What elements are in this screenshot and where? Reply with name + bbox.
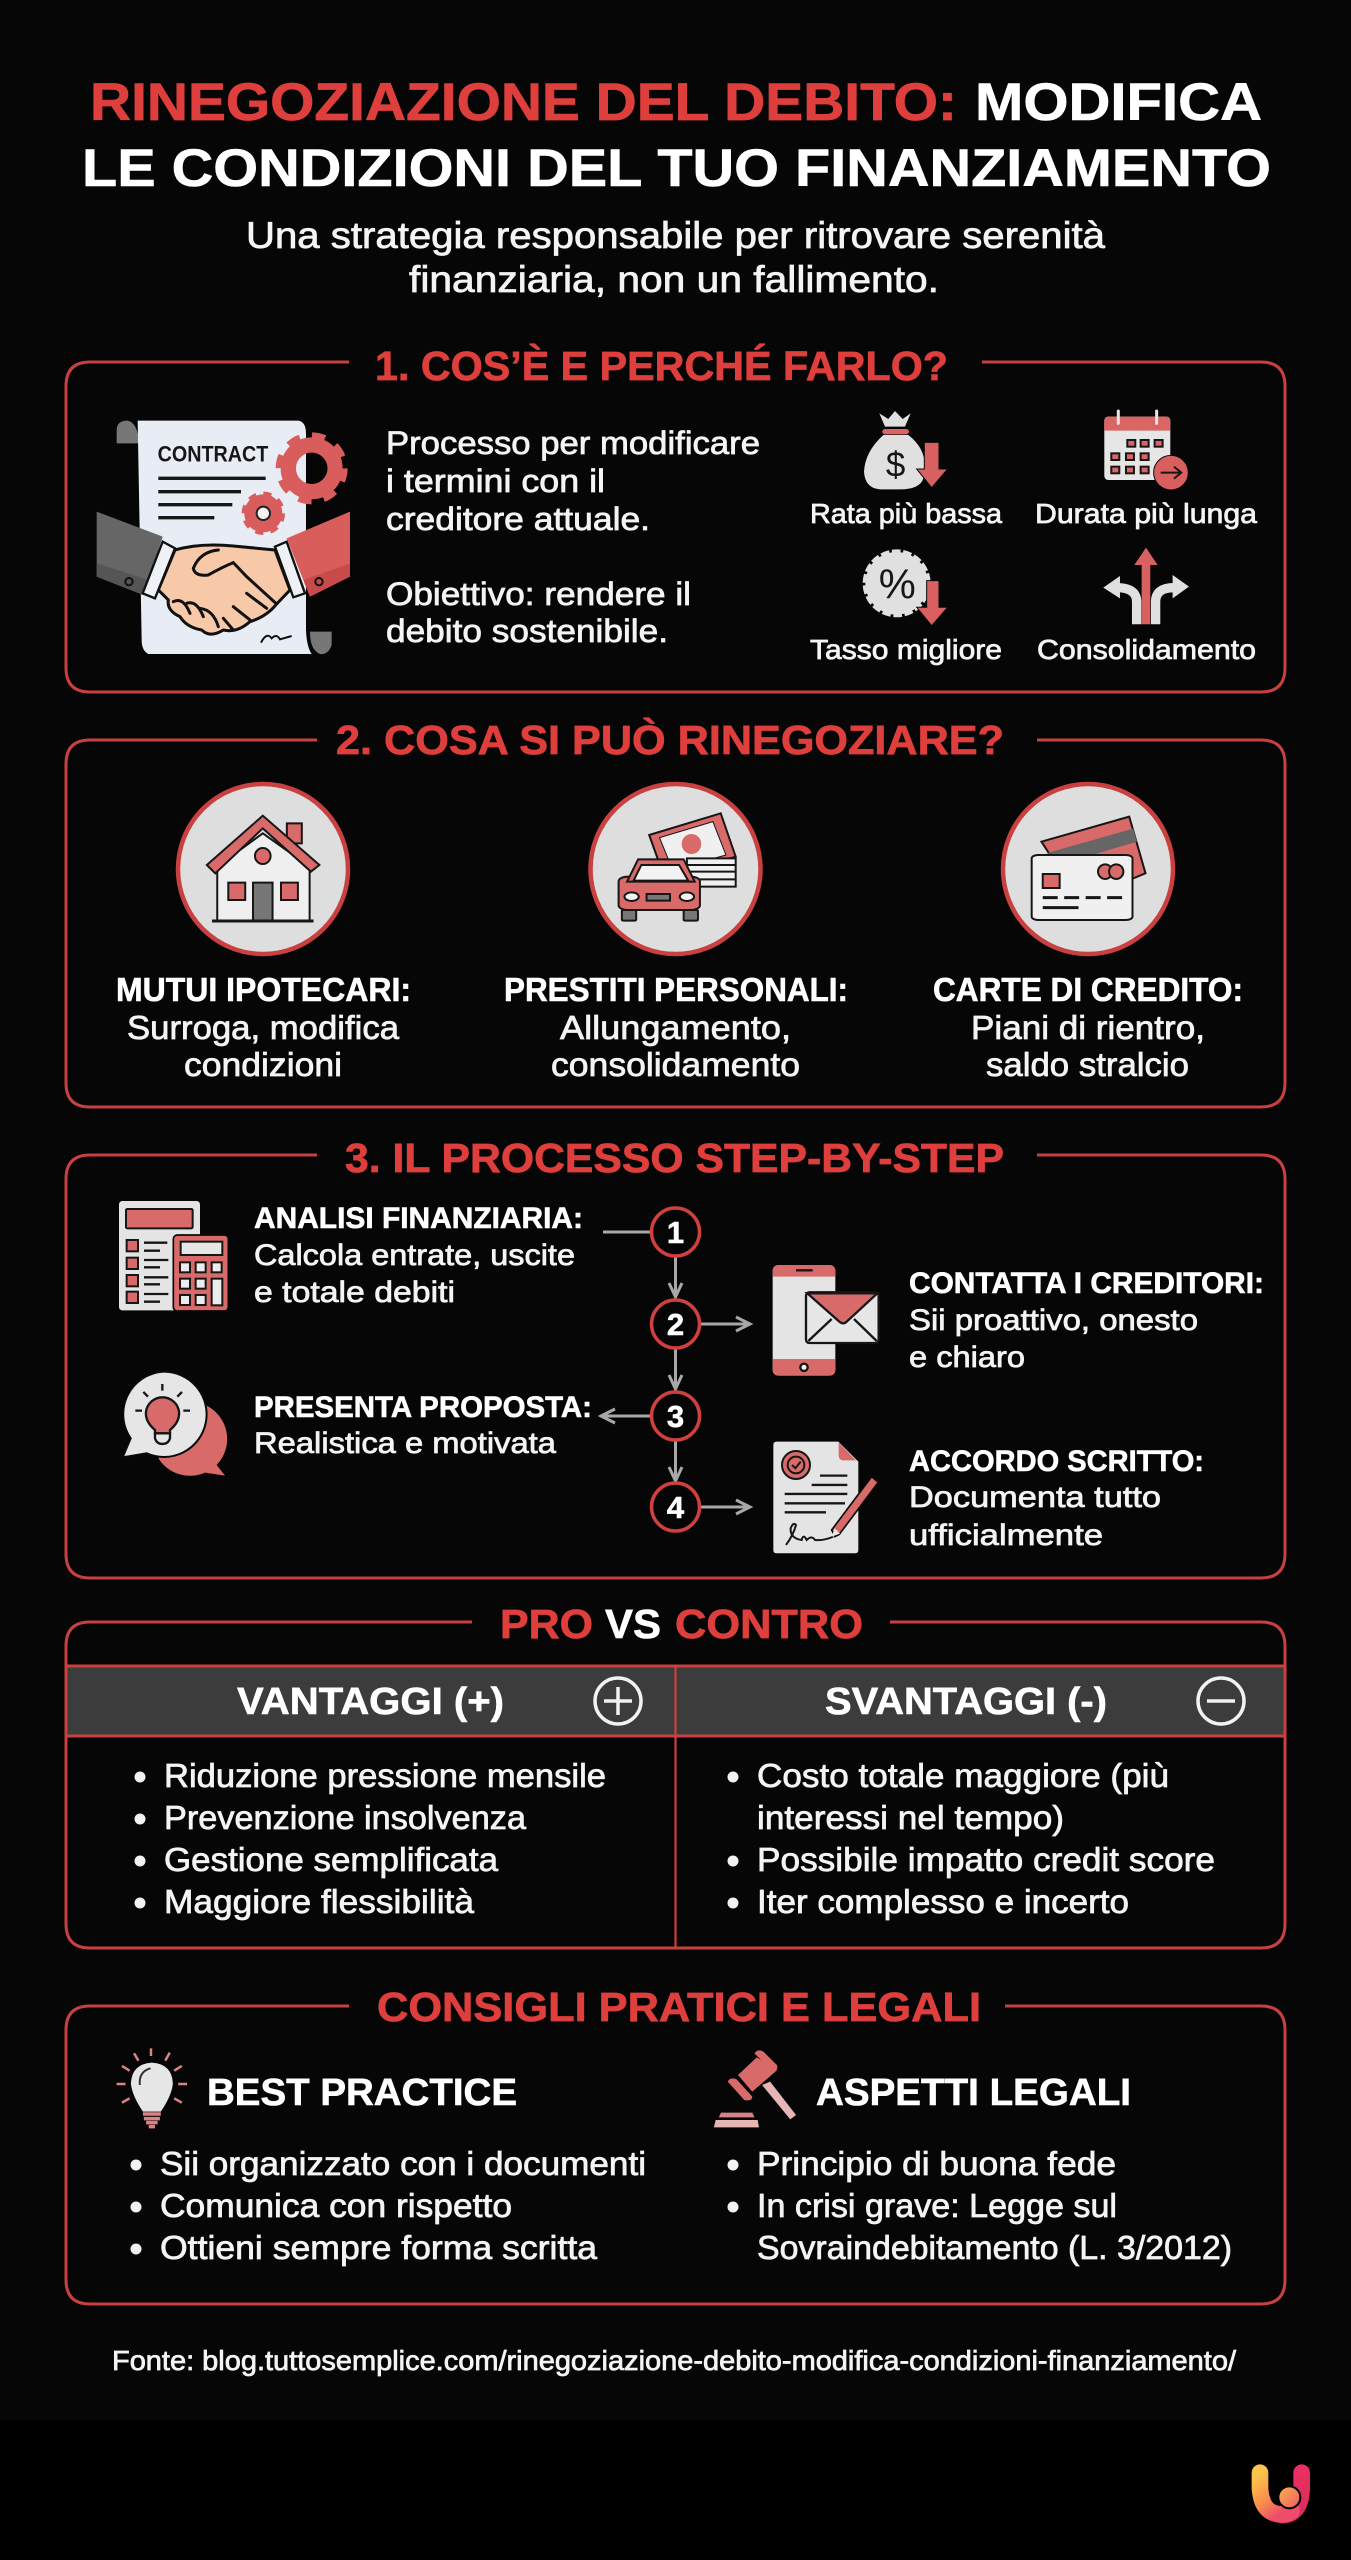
text: contatta i creditori: e chiaro <box>909 1341 1025 1374</box>
icon: credit cards <box>1003 784 1173 954</box>
panel: pro vs contro <box>66 1601 1285 1948</box>
icon: tasso migliore: % <box>879 560 916 607</box>
list: best practice: Comunica con rispetto <box>160 2187 512 2224</box>
text: description: debito sostenibile. <box>386 613 668 649</box>
text: mutui ipotecari: condizioni <box>184 1046 342 1083</box>
subtitle: Una strategia responsabile per ritrovare serenità <box>246 215 1105 256</box>
icon: signed document <box>773 1442 878 1553</box>
panel: consigli pratici e legali <box>66 1984 1285 2304</box>
text: carte di credito: CARTE DI CREDITO: <box>933 971 1243 1008</box>
text: contatta i creditori: CONTATTA I CREDITORI: <box>909 1267 1264 1300</box>
list: vantaggi <box>134 1757 606 1920</box>
label: rata più bassa: Rata più bassa <box>810 498 1002 529</box>
panel: cos'è e perché farlo <box>66 343 1285 692</box>
text: analisi finanziaria: Calcola entrate, uscite <box>254 1239 575 1272</box>
text: accordo scritto: ACCORDO SCRITTO: <box>909 1445 1204 1478</box>
heading: consigli: CONSIGLI PRATICI E LEGALI <box>377 1984 981 2030</box>
subtitle <box>246 215 1105 300</box>
list: vantaggi: Gestione semplificata <box>164 1841 499 1878</box>
text: description: Processo per modificare <box>386 425 760 461</box>
logo <box>1260 2473 1302 2515</box>
heading: section 1: 1. COS’È E PERCHÉ FARLO? <box>375 343 948 389</box>
text: presenta proposta <box>254 1391 592 1460</box>
list: vantaggi: Maggiore flessibilità <box>164 1883 475 1920</box>
list: best practice: Sii organizzato con i documenti <box>160 2145 646 2182</box>
heading: section 2: 2. COSA SI PUÒ RINEGOZIARE? <box>336 717 1004 763</box>
source line: Fonte: blog.tuttosemplice.com/rinegoziazione-debito-modifica-condizioni-finanziamento/ <box>112 2345 1236 2376</box>
text: contatta i creditori <box>909 1267 1264 1374</box>
list: vantaggi: Riduzione pressione mensile <box>164 1757 606 1794</box>
label: durata più lunga: Durata più lunga <box>1035 498 1257 529</box>
icon: rata più bassa: $ <box>886 446 905 485</box>
text: accordo scritto: Documenta tutto <box>909 1481 1161 1514</box>
step 2 <box>652 1300 700 1348</box>
list: aspetti legali: In crisi grave: Legge sul <box>757 2187 1117 2224</box>
heading: pro vs contro: PRO <box>500 1601 593 1647</box>
icon: durata più lunga <box>1104 411 1188 490</box>
text: carte di credito: Piani di rientro, <box>971 1009 1205 1046</box>
header: vantaggi: VANTAGGI (+) <box>237 1681 504 1723</box>
step 4: 4 <box>667 1490 685 1525</box>
list: aspetti legali <box>728 2145 1232 2266</box>
text: description: i termini con il <box>386 463 605 499</box>
label: consolidamento: Consolidamento <box>1037 634 1256 665</box>
icon: house <box>178 784 348 954</box>
step 2: 2 <box>667 1307 684 1342</box>
list: svantaggi: interessi nel tempo) <box>757 1799 1064 1836</box>
list: best practice: Ottieni sempre forma scritta <box>160 2229 598 2266</box>
text: description: creditore attuale. <box>386 501 650 537</box>
icon: light bulb <box>117 2048 187 2127</box>
text: mutui ipotecari: MUTUI IPOTECARI: <box>116 971 411 1008</box>
text: analisi finanziaria <box>254 1202 583 1309</box>
text: prestiti personali <box>504 971 848 1083</box>
step 4 <box>652 1483 700 1531</box>
title: RINEGOZIAZIONE DEL DEBITO: <box>90 73 957 132</box>
heading: pro vs contro <box>500 1601 863 1647</box>
list: svantaggi <box>728 1757 1215 1920</box>
text: prestiti personali: Allungamento, <box>560 1009 791 1046</box>
title: LE CONDIZIONI DEL TUO FINANZIAMENTO <box>82 139 1271 198</box>
header: aspetti legali: ASPETTI LEGALI <box>816 2072 1131 2114</box>
icon: gavel <box>714 2050 796 2127</box>
heading: section 3: 3. IL PROCESSO STEP-BY-STEP <box>345 1135 1004 1181</box>
icon: phone and envelope <box>773 1265 879 1376</box>
label: tasso migliore: Tasso migliore <box>810 634 1002 665</box>
step 3: 3 <box>667 1399 684 1434</box>
panel: processo step-by-step <box>66 1135 1285 1578</box>
list: vantaggi: Prevenzione insolvenza <box>164 1799 527 1836</box>
list: svantaggi: Possibile impatto credit score <box>757 1841 1215 1878</box>
text: accordo scritto <box>909 1445 1204 1552</box>
icon: contract and handshake: CONTRACT <box>158 442 269 467</box>
text: prestiti personali: consolidamento <box>551 1046 800 1083</box>
text: analisi finanziaria: e totale debiti <box>254 1276 455 1309</box>
text: contatta i creditori: Sii proattivo, onesto <box>909 1304 1198 1337</box>
text: description: Obiettivo: rendere il <box>386 576 691 612</box>
title <box>82 73 1271 198</box>
heading: pro vs contro: VS <box>605 1601 661 1647</box>
list: svantaggi: Costo totale maggiore (più <box>757 1757 1169 1794</box>
list: aspetti legali: Sovraindebitamento (L. 3/2012) <box>757 2229 1232 2266</box>
text: accordo scritto: ufficialmente <box>909 1519 1103 1552</box>
text: carte di credito: saldo stralcio <box>986 1046 1189 1083</box>
list: svantaggi: Iter complesso e incerto <box>757 1883 1129 1920</box>
panel: cosa si può rinegoziare <box>66 717 1285 1107</box>
text: description <box>386 425 760 649</box>
text: prestiti personali: PRESTITI PERSONALI: <box>504 971 848 1008</box>
text: mutui ipotecari <box>116 971 411 1083</box>
subtitle: finanziaria, non un fallimento. <box>409 259 939 300</box>
text: analisi finanziaria: ANALISI FINANZIARIA: <box>254 1202 583 1235</box>
icon: tasso migliore <box>864 551 948 626</box>
text: mutui ipotecari: Surroga, modifica <box>127 1009 400 1046</box>
icon: calculator and sheet <box>119 1201 228 1311</box>
text: carte di credito <box>933 971 1243 1083</box>
list: best practice <box>130 2145 646 2266</box>
header: best practice: BEST PRACTICE <box>207 2072 517 2114</box>
list: aspetti legali: Principio di buona fede <box>757 2145 1116 2182</box>
icon: consolidamento <box>1103 548 1189 624</box>
icon: idea speech bubble <box>123 1372 227 1476</box>
step 1 <box>652 1208 700 1256</box>
arrows: process flow <box>601 1232 750 1514</box>
icon: contract and handshake <box>97 421 350 654</box>
header: svantaggi: SVANTAGGI (-) <box>825 1681 1107 1723</box>
icon: plus <box>595 1678 641 1724</box>
step 1: 1 <box>667 1215 684 1250</box>
text: presenta proposta: PRESENTA PROPOSTA: <box>254 1391 592 1424</box>
text: presenta proposta: Realistica e motivata <box>254 1427 556 1460</box>
step 3 <box>652 1392 700 1440</box>
icon: minus <box>1198 1678 1244 1724</box>
heading: pro vs contro: CONTRO <box>675 1601 863 1647</box>
icon: rata più bassa <box>864 411 948 489</box>
title: MODIFICA <box>975 73 1262 132</box>
icon: car and money <box>590 784 760 954</box>
